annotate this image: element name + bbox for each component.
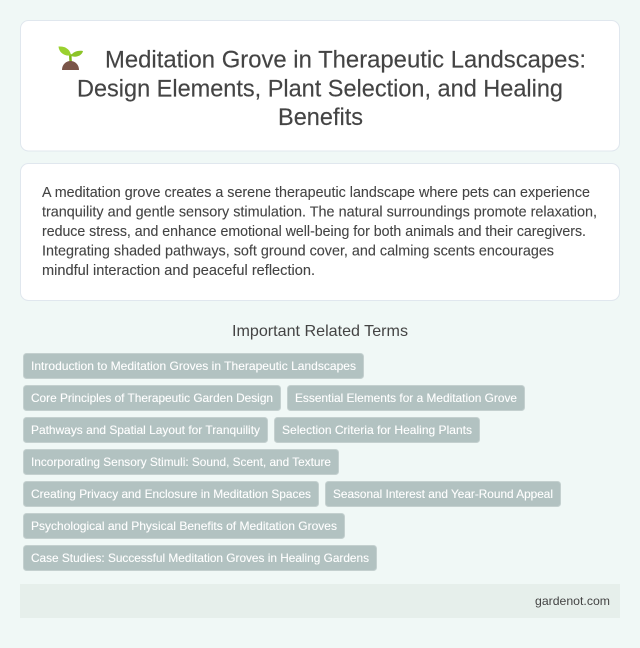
heading: important related terms: Important Related Terms xyxy=(232,323,408,340)
tag: Seasonal Interest and Year-Round Appeal xyxy=(333,487,553,501)
description text: reduce stress, and enhance emotional well-being for both animals and their caregivers. xyxy=(42,224,586,240)
description text: A meditation grove creates a serene therapeutic landscape where pets can experience xyxy=(42,185,590,201)
icon: seedling xyxy=(58,46,83,70)
tag: Pathways and Spatial Layout for Tranquility xyxy=(31,423,260,437)
tag: Introduction to Meditation Groves in Therapeutic Landscapes xyxy=(31,359,356,373)
tag list xyxy=(24,354,560,570)
tag xyxy=(274,418,480,442)
tag xyxy=(326,482,560,506)
description text: mindful interaction and peaceful reflection. xyxy=(42,263,315,279)
description text xyxy=(42,185,597,279)
tag: Creating Privacy and Enclosure in Meditation Spaces xyxy=(31,487,311,501)
tag xyxy=(24,546,376,570)
tag xyxy=(24,418,268,442)
tag: Core Principles of Therapeutic Garden Design xyxy=(31,391,273,405)
tag: Selection Criteria for Healing Plants xyxy=(282,423,472,437)
description text: Integrating shaded pathways, soft ground cover, and calming scents encourages xyxy=(42,244,554,260)
tag xyxy=(24,450,338,474)
title text xyxy=(77,46,586,131)
title text: Meditation Grove in Therapeutic Landscapes: xyxy=(105,46,586,74)
tag xyxy=(24,482,318,506)
footer xyxy=(20,584,620,618)
tag: Incorporating Sensory Stimuli: Sound, Scent, and Texture xyxy=(31,455,331,469)
panel: description xyxy=(20,164,620,300)
footer: gardenot.com xyxy=(535,594,610,608)
tag xyxy=(24,354,364,378)
description text: tranquility and gentle sensory stimulation. The natural surroundings promote relaxation, xyxy=(42,204,597,220)
title text: Design Elements, Plant Selection, and Healing xyxy=(77,76,563,102)
tag: Case Studies: Successful Meditation Groves in Healing Gardens xyxy=(31,551,369,565)
title text: Benefits xyxy=(278,104,363,131)
tag: Psychological and Physical Benefits of Meditation Groves xyxy=(31,519,337,533)
panel: title card xyxy=(20,20,620,151)
tag xyxy=(288,386,524,410)
tag xyxy=(24,386,280,410)
tag: Essential Elements for a Meditation Grove xyxy=(295,391,517,405)
tag xyxy=(24,514,344,538)
